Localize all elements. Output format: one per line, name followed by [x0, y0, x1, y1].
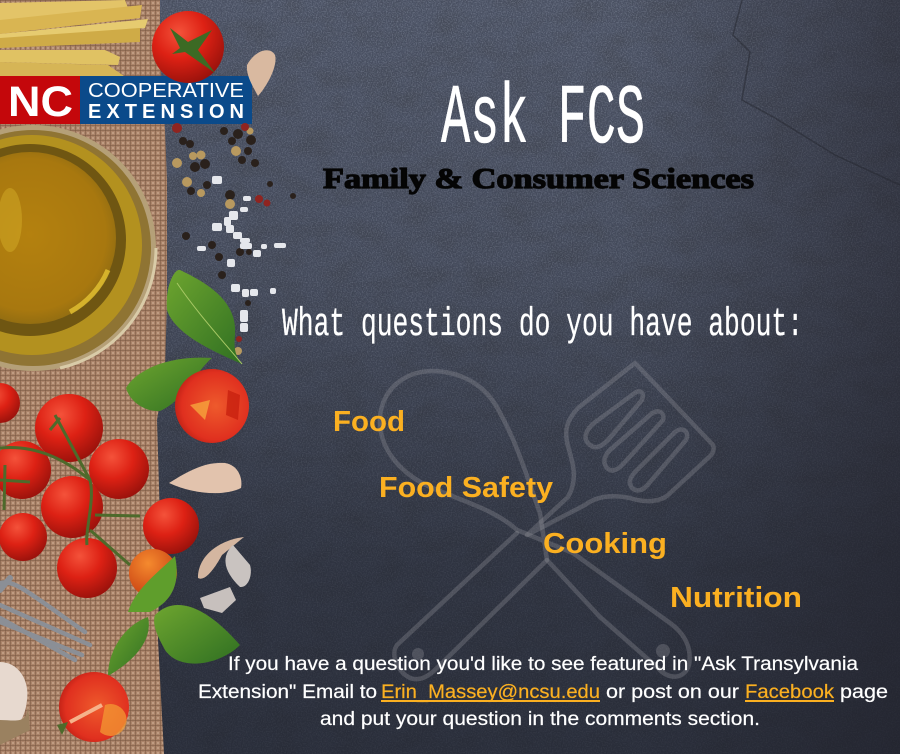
- NC Cooperative Extension logo: NC: [8, 78, 73, 126]
- call to action text: and put your question in the comments section.: [320, 709, 760, 730]
- oil bowl: [0, 125, 156, 371]
- call to action text: If you have a question you'd like to see featured in "Ask Transylvania: [228, 654, 858, 675]
- call to action text: Erin_Massey@ncsu.edu: [381, 682, 600, 703]
- topic list: [333, 406, 802, 614]
- call to action text: [198, 654, 888, 730]
- icon: garlic clove top: [247, 50, 276, 96]
- burlap cloth: [0, 0, 168, 754]
- peppercorns and salt: [172, 123, 296, 355]
- call to action text: page: [840, 682, 888, 703]
- garlic bulb: [0, 662, 30, 745]
- basil leaf upper: [167, 270, 242, 364]
- watermark: crossed spoon and spatula: [380, 363, 714, 679]
- topic: food safety: Food Safety: [379, 472, 553, 504]
- basil sprig: [108, 556, 240, 676]
- top tomato: [152, 11, 224, 83]
- fork: [0, 578, 90, 660]
- topic: nutrition: Nutrition: [670, 582, 802, 614]
- cut tomato right: [175, 369, 249, 443]
- call to action text: Extension" Email to: [198, 682, 377, 703]
- subtitle: Family & Consumer Sciences: [323, 163, 754, 195]
- pasta bundle: [0, 0, 148, 76]
- garlic cloves: [169, 463, 251, 613]
- cut tomato bottom: [57, 672, 129, 742]
- tomatoes on the vine: [0, 383, 199, 598]
- NC Cooperative Extension logo: [0, 76, 252, 126]
- NC Cooperative Extension logo: COOPERATIVE: [88, 80, 244, 102]
- call to action text: or post on our: [606, 682, 740, 703]
- topic: food: Food: [333, 406, 405, 438]
- call to action text: Facebook: [745, 682, 835, 703]
- NC Cooperative Extension logo: EXTENSION: [88, 101, 244, 123]
- title: Ask FCS: [441, 73, 645, 168]
- basil leaf middle: [126, 358, 212, 411]
- topic: cooking: Cooking: [543, 528, 667, 560]
